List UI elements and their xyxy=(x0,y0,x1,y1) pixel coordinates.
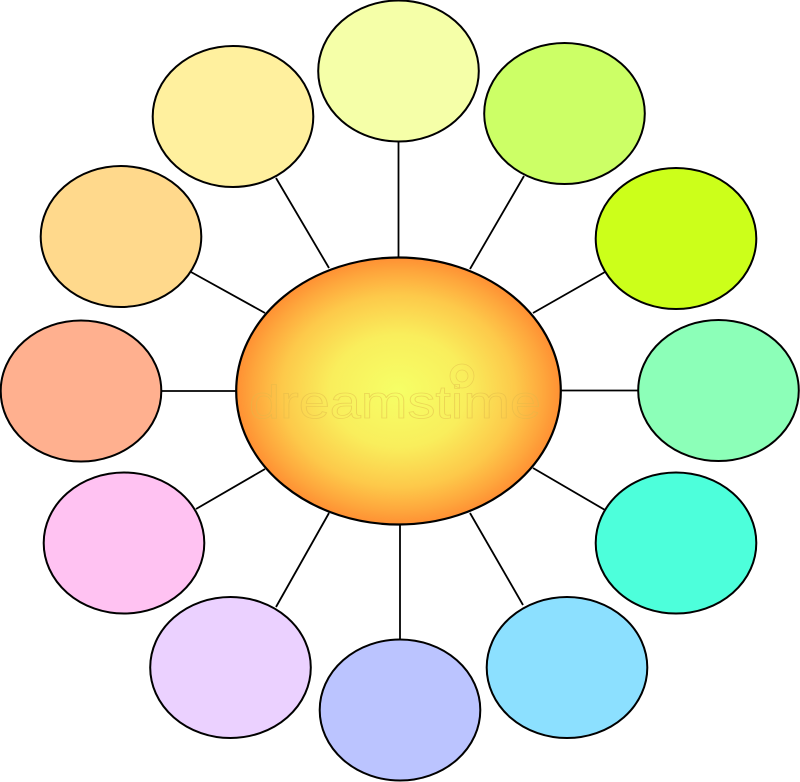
bubble: bottom, periwinkle xyxy=(320,640,480,780)
bubble: lower left, lavender xyxy=(150,597,311,738)
bubble: left, salmon xyxy=(1,320,161,462)
connector lines xyxy=(161,140,639,640)
central hub ellipse xyxy=(236,258,561,524)
bubble: right lower, turquoise xyxy=(596,472,756,614)
bubble: left lower, pink xyxy=(44,472,204,614)
bubble: top, pale yellow xyxy=(318,0,479,142)
bubble: upper right, light green xyxy=(484,43,645,184)
bubble: upper left, pale gold xyxy=(153,46,313,187)
watermark xyxy=(249,364,541,428)
watermark: dreamstime xyxy=(249,376,541,428)
bubble: right, mint xyxy=(638,320,799,461)
bubble: right upper, lime xyxy=(596,168,756,309)
bubble: left upper, light orange xyxy=(41,166,201,307)
bubble: lower right, sky blue xyxy=(487,597,647,738)
